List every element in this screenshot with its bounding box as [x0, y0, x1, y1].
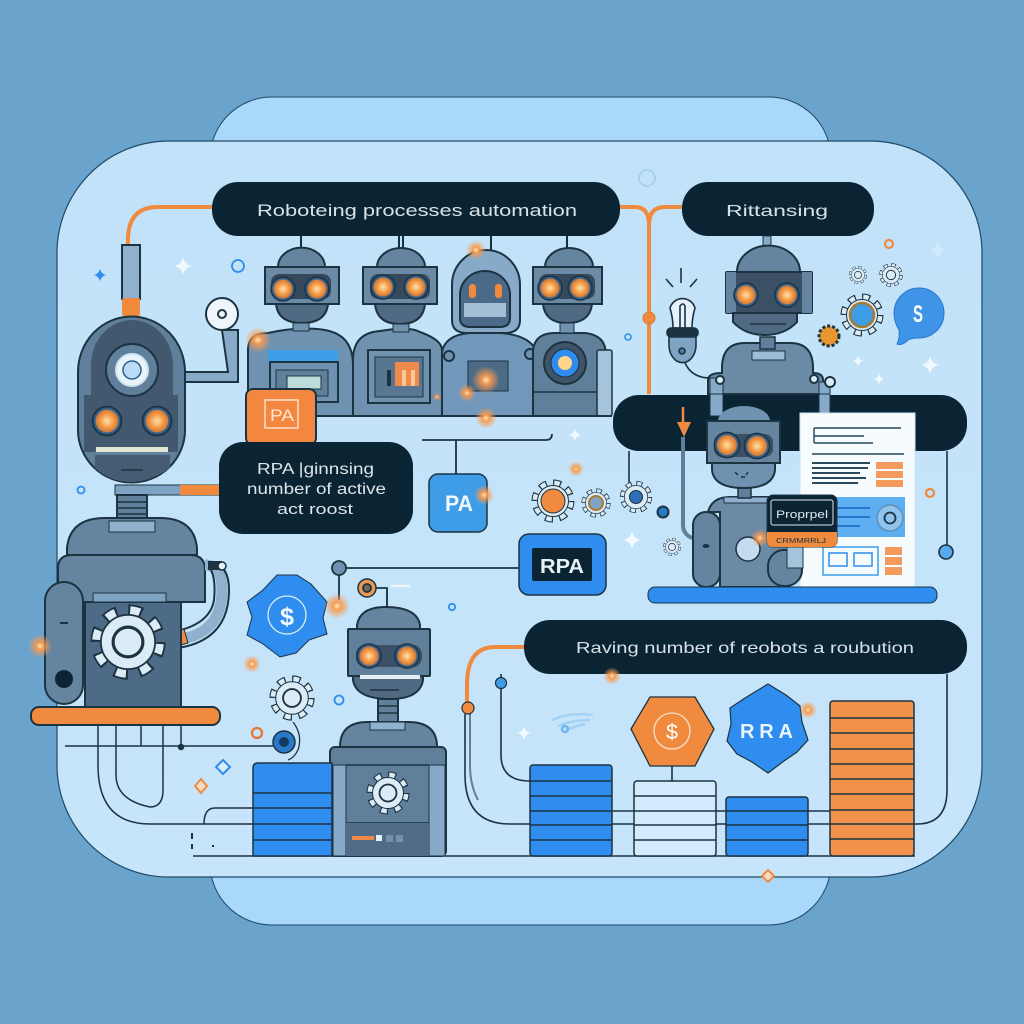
- bar: blue 1: [530, 765, 612, 856]
- icon: dollar badge blue: [247, 575, 327, 657]
- icon: node blue: [273, 722, 300, 760]
- tag on small robot: [767, 495, 837, 547]
- pill: RPA description: RPA |ginnsing: [257, 461, 374, 478]
- icons: top right gears: [819, 266, 900, 346]
- icon: speech bubble: S: [913, 301, 923, 328]
- tag on small robot: Proprpel: [776, 509, 828, 521]
- decorative sparkles: [94, 241, 947, 882]
- pill: distribution: [524, 620, 967, 674]
- robot row: robot 1: [248, 248, 353, 416]
- robot: bottom center: [330, 589, 446, 856]
- tag: blue PA: PA: [445, 491, 473, 516]
- icon: gear lower: [274, 680, 310, 716]
- bar chart: [530, 701, 914, 856]
- connector: top orange lines: [128, 207, 682, 394]
- baseline under robot row: [248, 415, 612, 417]
- bar: orange: [830, 701, 914, 856]
- small gears and nodes: [623, 484, 679, 554]
- gears middle: [536, 484, 608, 518]
- arrow: orange down: [677, 407, 692, 538]
- badge: orange hexagon: $: [666, 721, 678, 744]
- middle connector line: [422, 434, 552, 475]
- robot row: robot 4: [533, 248, 612, 416]
- connector to RPA tag: [332, 561, 519, 607]
- pill: subtitle: [682, 182, 874, 236]
- orange glows: [28, 240, 817, 719]
- robot: front small: [693, 406, 803, 587]
- icon: lightbulb: [666, 268, 710, 378]
- pill: subtitle: Rittansing: [726, 203, 828, 220]
- badge: orange hexagon: [631, 697, 714, 766]
- decorative rings: [78, 170, 934, 738]
- badge: blue RRA: RRA: [740, 721, 793, 743]
- pill: RPA description: number of active: [247, 481, 386, 498]
- tag: RPA: [519, 534, 606, 595]
- pill: title: [212, 182, 620, 236]
- robot row: robot 2: [353, 248, 442, 416]
- connector: robot drop lines: [301, 236, 567, 250]
- pill: RPA description: act roost: [277, 501, 354, 518]
- robot row: robot 3: [442, 250, 537, 416]
- tag on small robot: CRMMRRLJ: [776, 538, 826, 545]
- stack: blue left: [253, 763, 332, 856]
- pill: distribution: Raving number of reobots a roubution: [576, 640, 914, 657]
- tag: RPA: RPA: [540, 556, 584, 578]
- back panel: [210, 97, 831, 925]
- bar pill: [613, 395, 967, 451]
- right lines under pill: [629, 451, 953, 559]
- badge: blue RRA: [727, 684, 808, 773]
- main panel: [57, 141, 982, 877]
- connector: bottom right pipes: [462, 647, 947, 824]
- robot arms over pill: [710, 394, 830, 416]
- icon: speech bubble: [894, 288, 944, 344]
- document: [800, 413, 915, 587]
- pill: title: Roboteing processes automation: [257, 201, 577, 220]
- tag: orange PA: PA: [270, 406, 295, 425]
- tag: orange PA: [246, 389, 316, 445]
- tag: blue PA: [429, 474, 487, 532]
- robot: large left: [31, 245, 238, 725]
- robot: upper right: [708, 236, 835, 396]
- pill: RPA description: [219, 442, 413, 534]
- icon: faint wifi mark: [552, 714, 593, 732]
- bar: blue 2: [726, 797, 808, 856]
- base bar: [648, 587, 937, 603]
- wires under shelf: [65, 725, 915, 856]
- bar: white: [634, 781, 716, 856]
- icon: dollar badge blue: $: [280, 603, 294, 631]
